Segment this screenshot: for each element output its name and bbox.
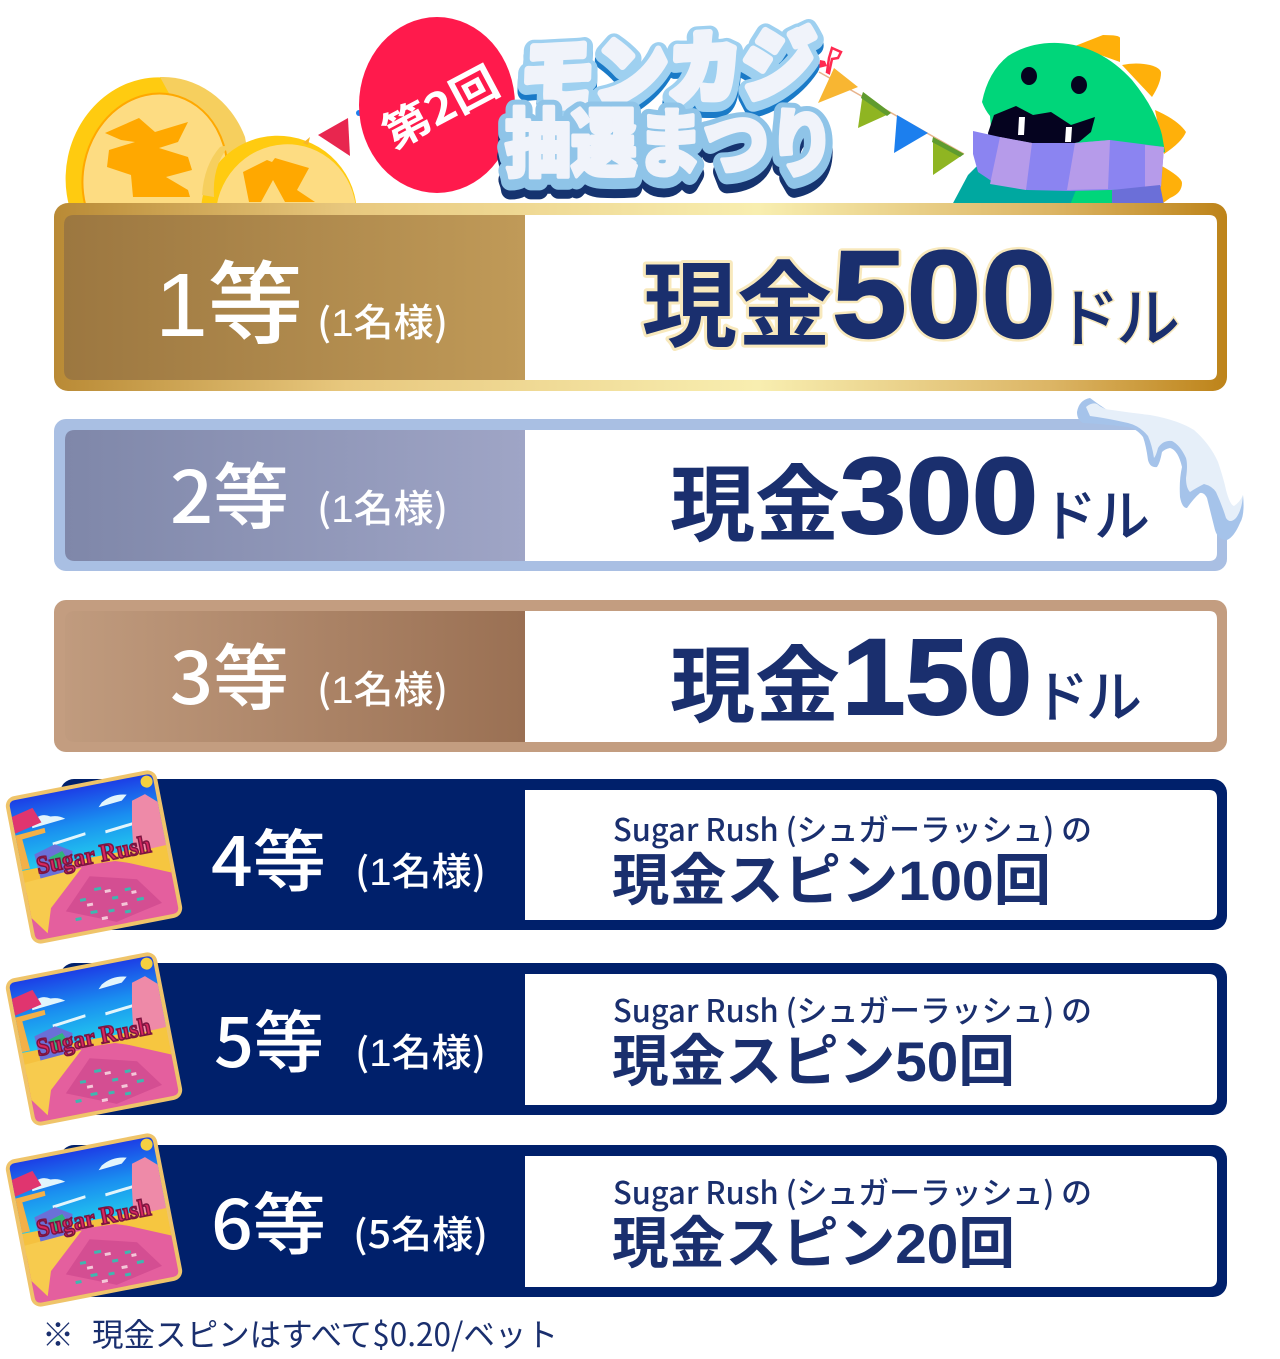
- bunting right: [818, 48, 964, 175]
- prize: 現金500ドル: [642, 226, 1178, 366]
- title: モンカジ抽選まつり: 抽選まつり: [505, 97, 835, 204]
- badge: 第2回: 第2回: [370, 49, 509, 161]
- label: 1名様: (1名様): [317, 478, 448, 533]
- label: 2等: 2等: [170, 439, 289, 544]
- prize: 現金500ドル: 現金: [642, 231, 832, 366]
- game card: Sugar Rush: [4, 951, 184, 1127]
- dinosaur scarf: [973, 131, 1164, 191]
- prize: 現金500ドル: 500: [832, 226, 1056, 364]
- prize: 現金150ドル: 現金: [670, 619, 840, 739]
- icon: small coin: [202, 136, 356, 203]
- label: 1等: 1等: [155, 232, 303, 362]
- prize: 現金300ドル: 300: [840, 435, 1038, 556]
- row: 2等 現金300ドル: [54, 419, 1227, 571]
- row: 4等 現金スピン100回: [4, 769, 1227, 945]
- prize: 現金300ドル: [670, 435, 1148, 558]
- prize: 現金300ドル: ドル: [1041, 472, 1148, 553]
- title: モンカジ抽選まつり: [505, 0, 835, 204]
- row: 6等 現金スピン20回: [4, 1132, 1227, 1308]
- prize text line 2: 現金スピン50回: [612, 1017, 1015, 1098]
- decoration: snow on row 2 corner: [1077, 393, 1245, 540]
- game card: Sugar Rush: Sugar Rush: [34, 1194, 153, 1243]
- game card: Sugar Rush: Sugar Rush: [34, 1013, 153, 1062]
- game card: Sugar Rush: [4, 1132, 184, 1308]
- label: 1名様: (1名様): [317, 659, 448, 714]
- title: モンカジ抽選まつり: モンカジ: [518, 2, 818, 132]
- dinosaur mouth: [988, 106, 1095, 143]
- prize: 現金500ドル: ドル: [1056, 268, 1178, 360]
- label: 6等: 6等: [211, 1170, 326, 1269]
- label: 5名様: (5名様): [353, 1204, 488, 1259]
- row: 5等 現金スピン50回: [4, 951, 1227, 1127]
- prize text line 1: Sugar Rush (シュガーラッシュ) の: [613, 1168, 1092, 1213]
- footnote: ※: [42, 1310, 74, 1356]
- badge: 第2回: [359, 17, 515, 193]
- game card: Sugar Rush: [4, 769, 184, 945]
- title: モンカジ抽選まつり: モンカジ: [518, 8, 818, 138]
- prize text line 2: 現金スピン20回: [612, 1199, 1015, 1280]
- title: モンカジ抽選まつり: モンカジ: [518, 0, 818, 129]
- bunting left: [303, 110, 362, 156]
- prize text line 2: 現金スピン100回: [612, 836, 1051, 917]
- header: coins: [66, 77, 356, 203]
- label: 4等: 4等: [211, 807, 326, 906]
- label: 1名様: (1名様): [317, 292, 448, 347]
- prize: 現金500ドル: 500: [832, 226, 1056, 364]
- dinosaur head: [982, 42, 1165, 152]
- prize text line 1: Sugar Rush (シュガーラッシュ) の: [613, 986, 1092, 1031]
- footnote: 現金スピンはすべて$0.20/ベット: [92, 1310, 558, 1356]
- title: モンカジ抽選まつり: 抽選まつり: [505, 88, 835, 195]
- game card: Sugar Rush: Sugar Rush: [34, 831, 153, 880]
- prize: 現金300ドル: 現金: [670, 438, 840, 558]
- label: 1名様: (1名様): [355, 1022, 486, 1077]
- label: 1名様: (1名様): [355, 841, 486, 896]
- icon: large coin: [66, 77, 246, 203]
- prize: 現金150ドル: 150: [842, 616, 1032, 737]
- dinosaur spikes: [1075, 35, 1186, 206]
- label: 3等: 3等: [170, 620, 289, 725]
- prize text line 1: Sugar Rush (シュガーラッシュ) の: [613, 805, 1092, 850]
- mascot: green dinosaur: [952, 35, 1186, 206]
- prize: 現金150ドル: [670, 616, 1140, 739]
- label: 5等: 5等: [214, 988, 324, 1087]
- row: 3等 現金150ドル: [54, 600, 1227, 752]
- prize: 現金150ドル: ドル: [1033, 653, 1140, 734]
- row: 1等 現金500ドル: [54, 203, 1227, 391]
- title: モンカジ抽選まつり: 抽選まつり: [505, 85, 835, 192]
